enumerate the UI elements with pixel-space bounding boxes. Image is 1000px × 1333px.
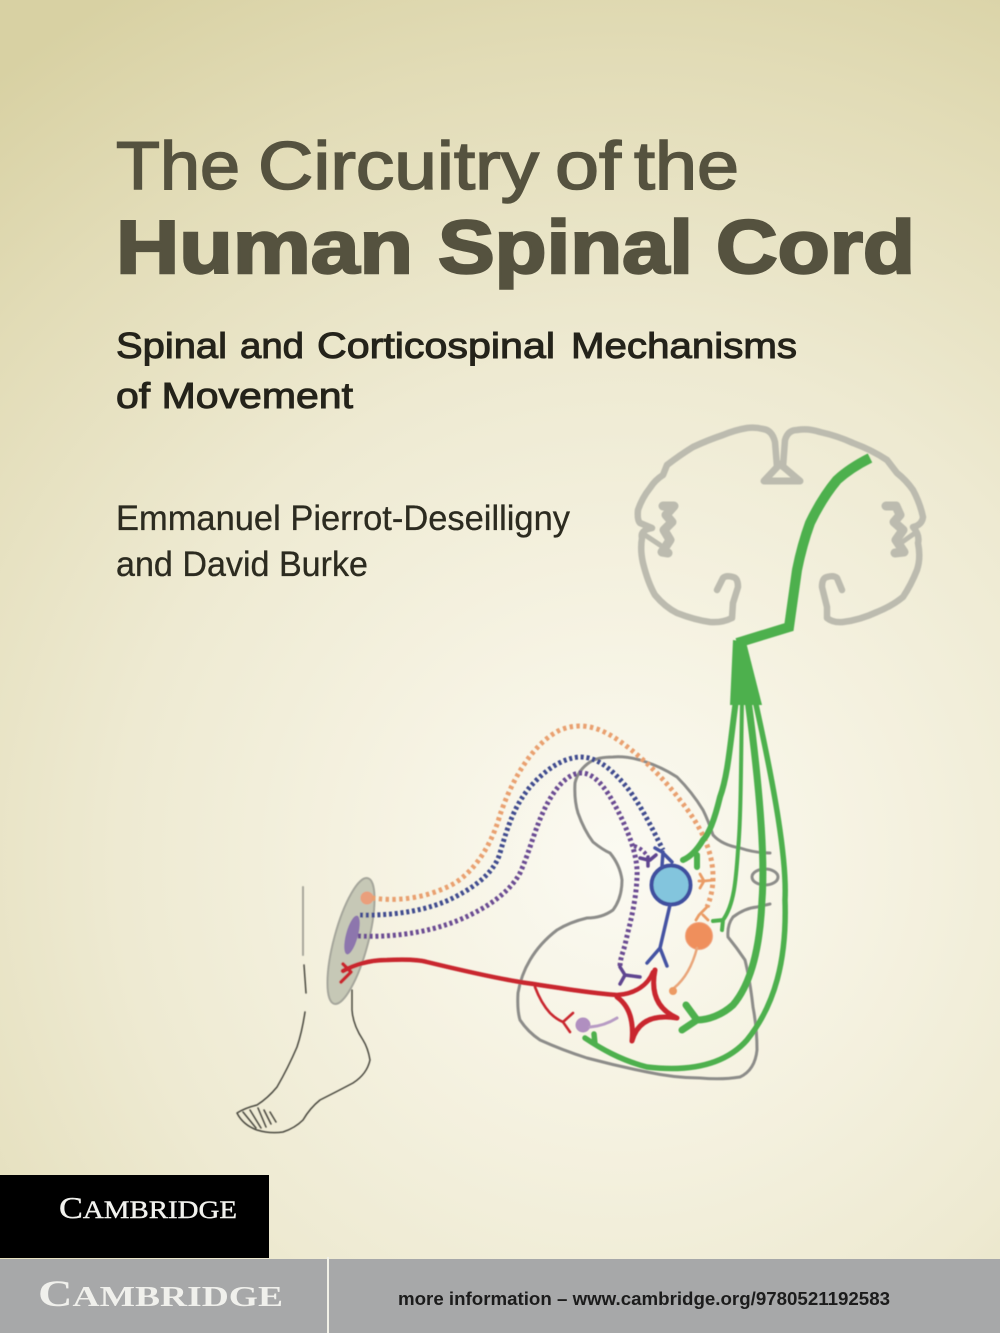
orange dotted afferent [372, 726, 713, 907]
grey footer band [0, 1257, 1000, 1333]
ankle and foot outline [237, 887, 370, 1133]
subtitle: Spinal [116, 325, 227, 366]
subtitle: Mechanisms [571, 325, 797, 366]
grey footer band: more information – www.cambridge.org/9780521192583 [398, 1289, 890, 1309]
title: Circuitry [258, 128, 539, 204]
purple dotted afferent [358, 773, 637, 967]
red motoneuron and axon [341, 960, 677, 1041]
authors: and David Burke [116, 545, 368, 584]
Cambridge black panel [0, 1175, 269, 1258]
blue dotted afferent [360, 757, 663, 915]
green corticospinal tract [585, 458, 870, 1069]
subtitle: of Movement [116, 375, 353, 416]
authors: Emmanuel Pierrot-Deseilligny [116, 499, 570, 538]
sensory dot [360, 892, 374, 904]
diagram: brain and spinal circuitry [237, 428, 923, 1133]
brain section outline [638, 428, 923, 622]
Cambridge black panel: CAMBRIDGE [59, 1190, 237, 1225]
subtitle: Corticospinal [317, 325, 555, 366]
muscle spindle [341, 914, 363, 956]
authors [116, 499, 570, 584]
orange interneuron [669, 874, 714, 995]
title: the [634, 128, 739, 204]
calf muscle [318, 874, 384, 1008]
grey footer band: C AMBRIDGE [38, 1274, 283, 1315]
purple interneuron [576, 1018, 617, 1032]
blue motoneuron [647, 848, 690, 966]
purple terminals [620, 855, 656, 984]
subtitle [116, 325, 797, 416]
purple dotted collateral [634, 846, 648, 857]
title: The [116, 128, 240, 204]
spinal cord grey matter outline [518, 757, 778, 1079]
title: Spinal [438, 205, 693, 289]
subtitle: and [240, 325, 304, 366]
title: Human [116, 205, 413, 289]
title: Cord [716, 205, 915, 289]
title [116, 128, 915, 289]
title: of [555, 128, 621, 204]
